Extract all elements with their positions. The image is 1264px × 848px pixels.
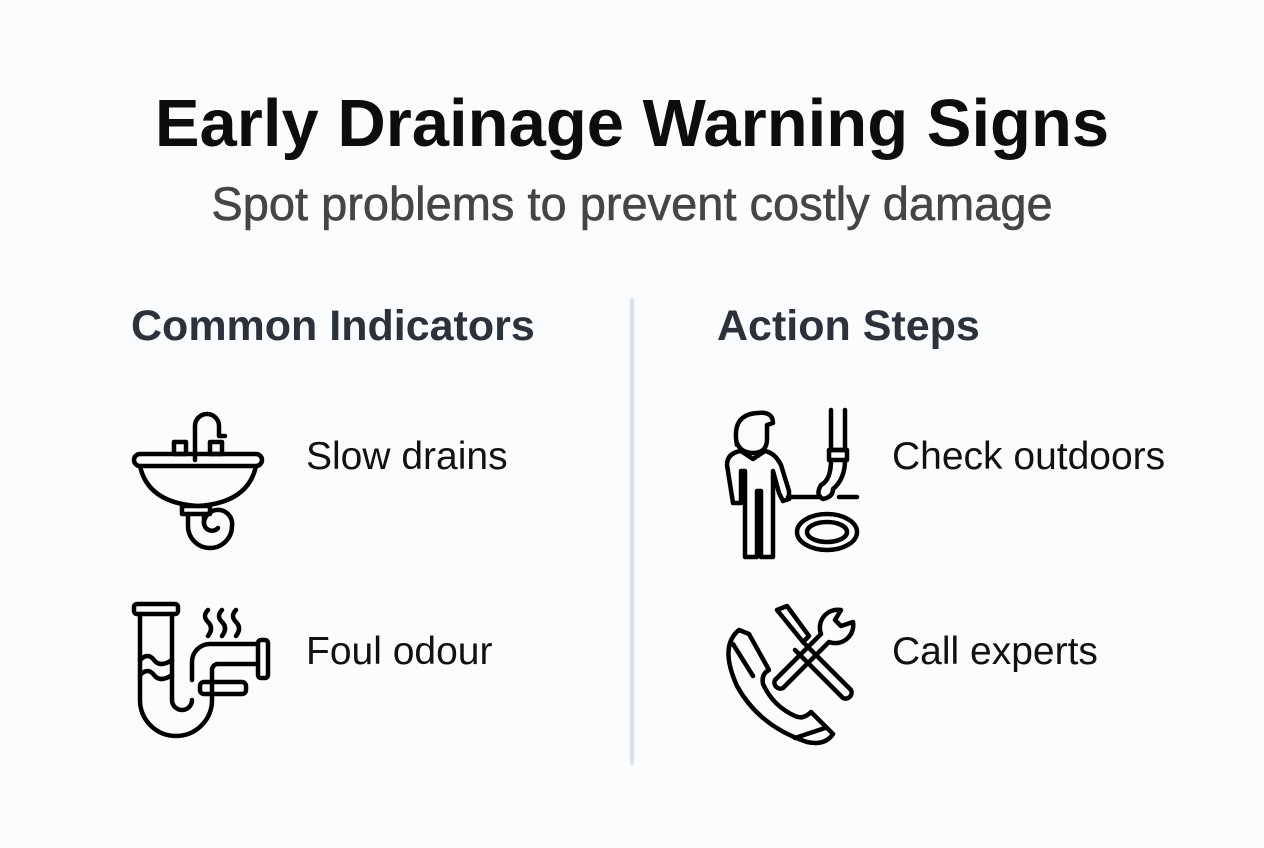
title: Early Drainage Warning Signs [155, 86, 1109, 161]
icon: person checking outdoor drain [724, 408, 860, 560]
subtitle: Spot problems to prevent costly damage [211, 177, 1053, 230]
text: foul odour: Foul odour [306, 630, 492, 673]
text: call experts: Call experts [892, 630, 1098, 673]
heading: common indicators: Common Indicators [131, 302, 535, 350]
icon: pipe with odour [132, 602, 270, 738]
divider [630, 298, 634, 765]
heading: action steps: Action Steps [717, 302, 980, 350]
text: slow drains: Slow drains [306, 435, 508, 478]
icon: phone and tools [726, 604, 856, 746]
icon: sink [132, 412, 264, 550]
text: check outdoors: Check outdoors [892, 435, 1165, 478]
